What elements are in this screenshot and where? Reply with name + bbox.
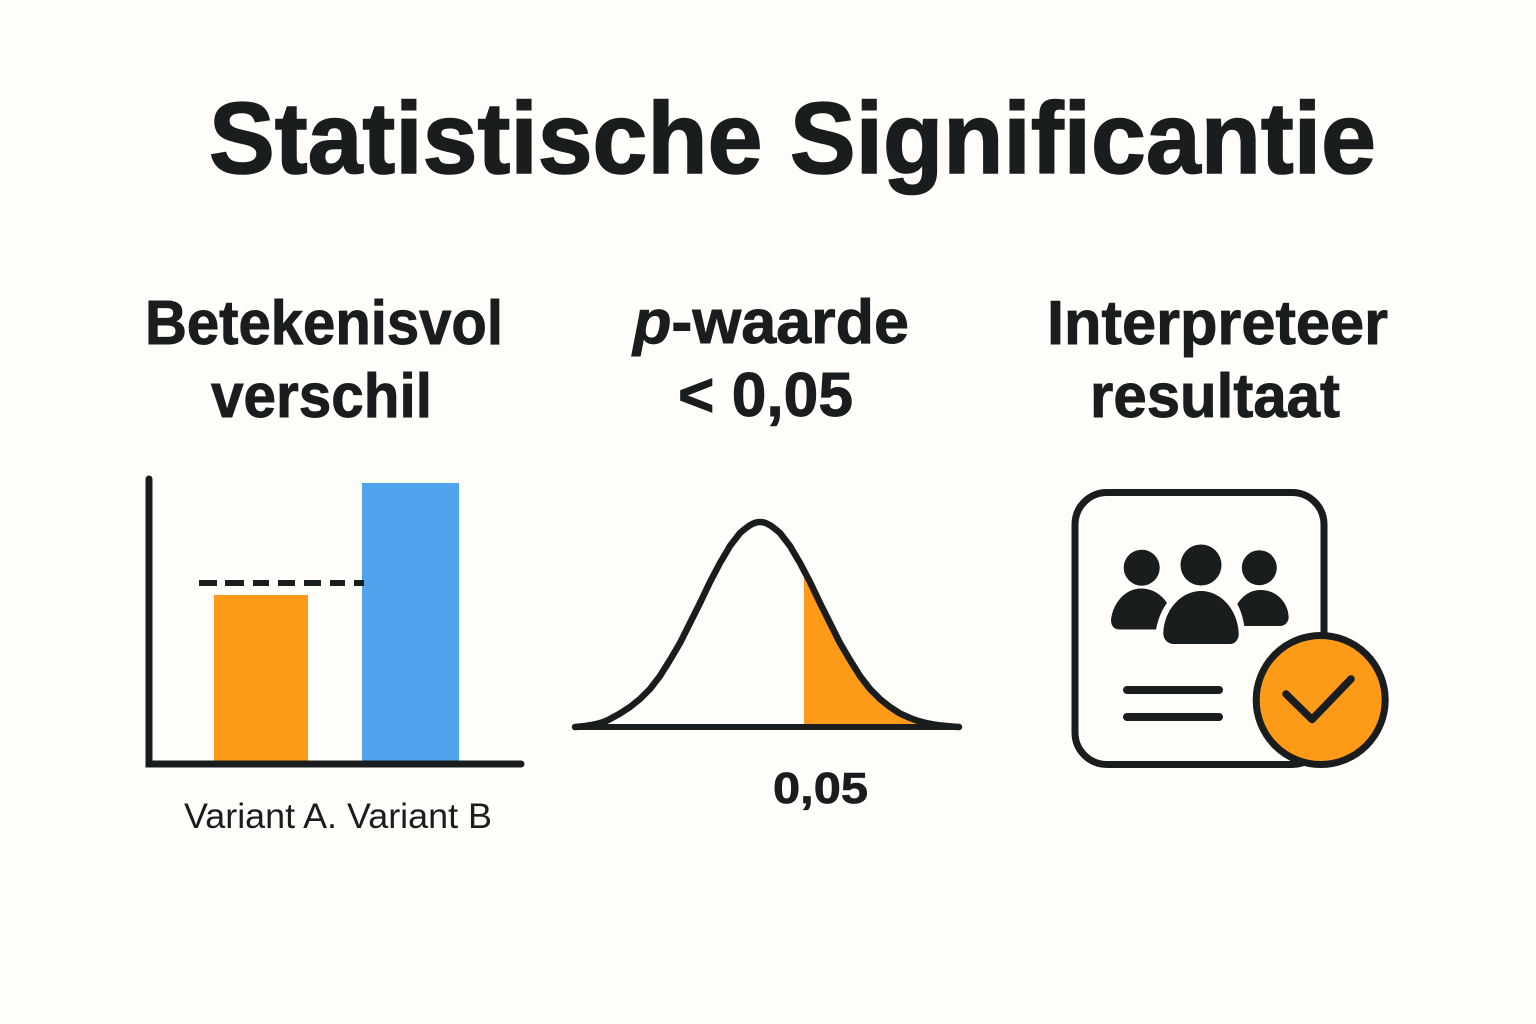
shaded tail area [804,570,925,724]
threshold label: 0,05 [773,764,868,813]
heading: p-waarde: p-waarde [631,288,909,357]
bar: variant A [214,595,308,762]
bar chart [149,479,521,836]
heading: p-waarde [631,288,909,430]
baseline [575,724,959,730]
dashed comparison line [199,580,364,586]
normal distribution chart [575,522,959,813]
icon: group of people [1111,544,1289,644]
text lines [1127,690,1219,717]
icon: report card [1075,492,1324,764]
bell curve [575,522,959,727]
title: Statistische Significantie [209,83,1376,195]
panel: interpreteer resultaat [1047,289,1388,764]
heading: interpreteer resultaat: Interpreteer [1047,289,1388,358]
heading: p-waarde: < 0,05 [678,361,853,430]
panel: betekenisvol verschil [145,289,521,836]
heading: betekenisvol verschil: Betekenisvol [145,289,503,358]
bar: variant B [362,483,459,762]
chart axes [149,479,521,764]
icon: check badge [1256,636,1385,764]
heading: interpreteer resultaat: resultaat [1090,362,1340,431]
heading: interpreteer resultaat [1047,289,1388,431]
heading: betekenisvol verschil: verschil [211,362,432,431]
heading: betekenisvol verschil [145,289,503,431]
panel: p-waarde [575,288,959,813]
axis labels: Variant A. Variant B [184,797,492,836]
